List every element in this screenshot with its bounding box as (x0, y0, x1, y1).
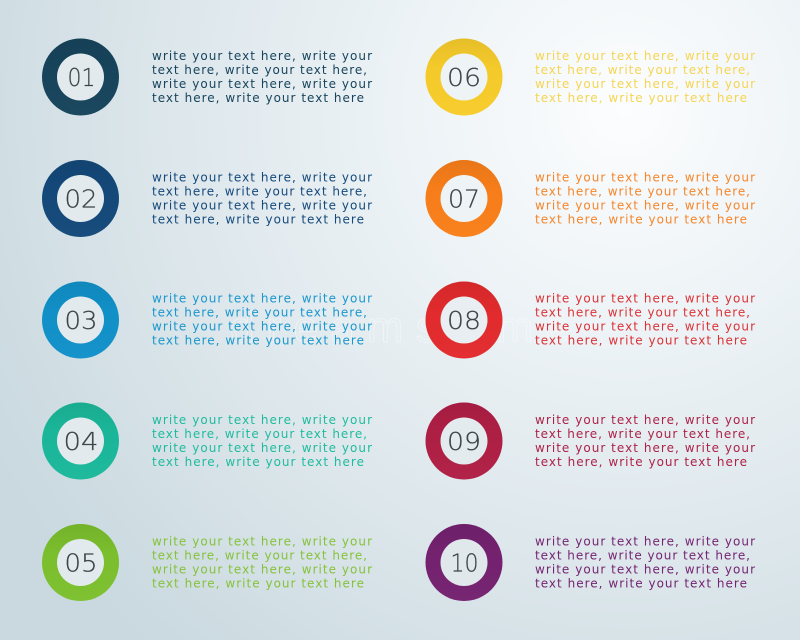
ring badge 09 (426, 402, 502, 480)
text block 04: text here, write your text here (152, 455, 364, 469)
text block 08 (535, 292, 755, 348)
text block 03 (152, 292, 372, 348)
text block 07: text here, write your text here (535, 212, 747, 226)
ring badge 03 (42, 282, 119, 358)
text block 03: text here, write your text here, (152, 306, 367, 320)
text block 05: write your text here, write your (152, 534, 372, 548)
text block 09: text here, write your text here, (535, 427, 750, 441)
ring badge 05 (42, 524, 119, 601)
text block 01: write your text here, write your (152, 49, 372, 63)
list item 02 (42, 160, 372, 237)
text block 04: text here, write your text here, (152, 427, 367, 441)
list item 09 (426, 402, 755, 480)
ring badge 01: 01 (68, 63, 96, 92)
ring badge 02: 02 (64, 184, 98, 214)
list item 07 (426, 160, 755, 237)
ring badge 10 (426, 524, 502, 601)
text block 06: write your text here, write your (535, 49, 755, 63)
text block 06: text here, write your text here (535, 91, 747, 105)
ring badge 09: 09 (447, 427, 481, 456)
text block 02: text here, write your text here (152, 212, 364, 226)
ring badge 07 (426, 160, 502, 237)
text block 10: write your text here, write your (535, 562, 755, 576)
text block 03: write your text here, write your (152, 320, 372, 334)
ring badge 01 (42, 38, 119, 116)
ring badge 04 (42, 402, 119, 480)
ring badge 02 (42, 160, 119, 237)
text block 02: text here, write your text here, (152, 184, 367, 198)
text block 08: text here, write your text here (535, 334, 747, 348)
text block 01: text here, write your text here, (152, 63, 367, 77)
text block 01: text here, write your text here (152, 91, 364, 105)
list item 10 (426, 524, 755, 601)
text block 06: write your text here, write your (535, 77, 755, 91)
ring badge 05: 05 (64, 548, 98, 578)
text block 01: write your text here, write your (152, 77, 372, 91)
text block 05: write your text here, write your (152, 562, 372, 576)
watermark: dreamstime (230, 303, 570, 352)
text block 09: write your text here, write your (535, 413, 755, 427)
text block 08: text here, write your text here, (535, 306, 750, 320)
text block 06: text here, write your text here, (535, 63, 750, 77)
list item 01 (42, 38, 372, 116)
text block 03: write your text here, write your (152, 292, 372, 306)
ring badge 06 (426, 38, 502, 116)
text block 04: write your text here, write your (152, 413, 372, 427)
text block 10: write your text here, write your (535, 534, 755, 548)
text block 07: write your text here, write your (535, 170, 755, 184)
ring badge 10: 10 (450, 548, 478, 578)
text block 02: write your text here, write your (152, 198, 372, 212)
text block 04 (152, 413, 372, 469)
text block 10 (535, 534, 755, 590)
list item 04 (42, 402, 372, 480)
list item 05 (42, 524, 372, 601)
text block 05: text here, write your text here (152, 576, 364, 590)
text block 05 (152, 534, 372, 590)
text block 08: write your text here, write your (535, 292, 755, 306)
text block 08: write your text here, write your (535, 320, 755, 334)
text block 05: text here, write your text here, (152, 548, 367, 562)
text block 09 (535, 413, 755, 469)
ring badge 04: 04 (64, 427, 98, 456)
text block 10: text here, write your text here (535, 576, 747, 590)
text block 04: write your text here, write your (152, 441, 372, 455)
text block 07: text here, write your text here, (535, 184, 750, 198)
text block 10: text here, write your text here, (535, 548, 750, 562)
list item 03 (42, 282, 372, 358)
text block 03: text here, write your text here (152, 334, 364, 348)
text block 02 (152, 170, 372, 226)
ring badge 06: 06 (447, 63, 481, 92)
ring badge 03: 03 (64, 306, 98, 335)
ring badge 08 (426, 282, 502, 358)
ring badge 08: 08 (447, 306, 481, 335)
text block 07: write your text here, write your (535, 198, 755, 212)
text block 09: text here, write your text here (535, 455, 747, 469)
text block 02: write your text here, write your (152, 170, 372, 184)
text block 09: write your text here, write your (535, 441, 755, 455)
text block 06 (535, 49, 755, 105)
text block 01 (152, 49, 372, 105)
ring badge 07: 07 (448, 184, 480, 214)
list item 08 (426, 282, 755, 358)
text block 07 (535, 170, 755, 226)
list item 06 (426, 38, 755, 116)
